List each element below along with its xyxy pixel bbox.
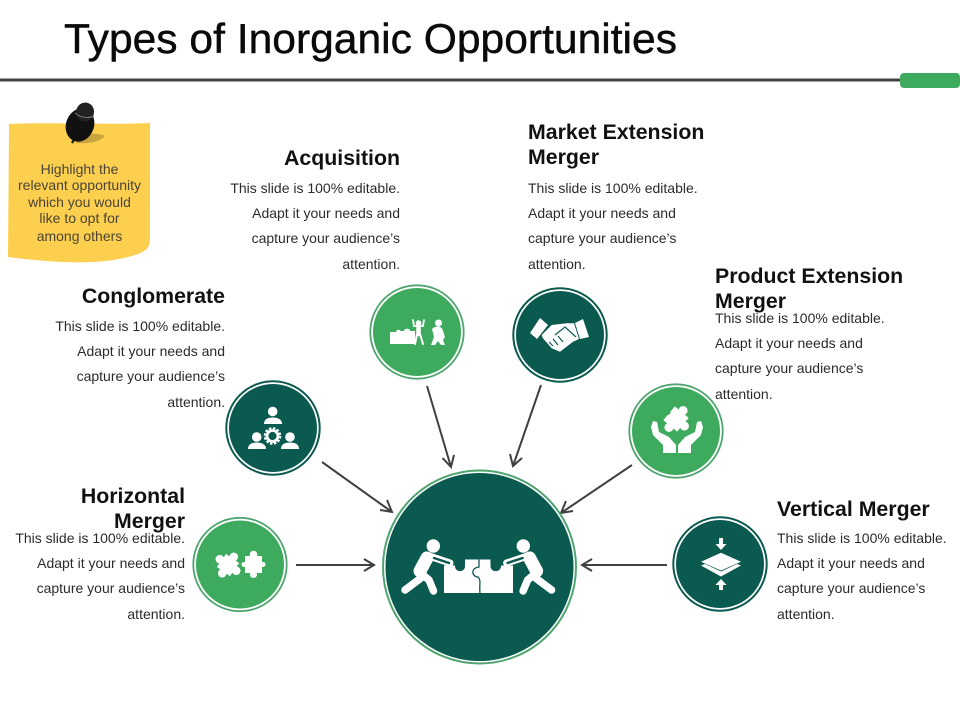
text block: Market Extension Merger: This slide is 100% editable.	[528, 180, 698, 196]
title: Types of Inorganic Opportunities	[64, 15, 677, 62]
text block: Horizontal Merger: attention.	[127, 606, 185, 622]
text block: Product Extension Merger	[715, 264, 903, 402]
text block: Product Extension Merger: Merger	[715, 289, 786, 313]
icon: puzzle pieces	[444, 560, 513, 593]
text block: Vertical Merger	[777, 497, 947, 622]
text block: Acquisition: attention.	[342, 256, 400, 272]
text block: Conglomerate	[55, 284, 225, 410]
text block: Product Extension Merger: Product Extension	[715, 264, 903, 288]
layers with arrows	[701, 538, 741, 590]
icon: right figure	[507, 539, 552, 591]
puzzle block	[390, 329, 415, 344]
text block: Horizontal Merger: Horizontal	[81, 484, 185, 508]
text block: Conglomerate: This slide is 100% editable.	[55, 318, 225, 334]
text block: Vertical Merger: Vertical Merger	[777, 497, 930, 521]
text block: Vertical Merger: capture your audience’s	[777, 580, 925, 596]
text block: Conglomerate: attention.	[167, 394, 225, 410]
puzzle seam	[473, 560, 480, 593]
text block: Conglomerate: capture your audience’s	[77, 368, 225, 384]
puzzle piece	[655, 398, 698, 441]
text block: Market Extension Merger: attention.	[528, 256, 586, 272]
sticky note	[8, 100, 150, 262]
circle icon: Conglomerate	[226, 381, 320, 475]
text block: Horizontal Merger	[15, 484, 185, 622]
arrow: Acquisition to centre	[427, 386, 454, 467]
note paper	[8, 123, 150, 262]
text block: Vertical Merger: attention.	[777, 606, 835, 622]
circle icon: Market Extension Merger	[513, 288, 607, 382]
circle icon: Vertical Merger	[673, 517, 767, 611]
note text: Highlight the	[41, 161, 119, 177]
text block: Acquisition	[230, 146, 400, 272]
text block: Market Extension Merger: Adapt it your needs and	[528, 205, 676, 221]
text block: Acquisition: Acquisition	[284, 146, 400, 170]
note text: which you would	[27, 194, 131, 210]
note text: like to opt for	[39, 210, 120, 226]
text block: Product Extension Merger: Adapt it your needs and	[715, 335, 863, 351]
circle icon: Product Extension Merger	[629, 384, 723, 478]
circle icon: Horizontal Merger	[193, 518, 287, 611]
text block: Horizontal Merger: Merger	[114, 509, 185, 533]
title rule with green tab	[0, 73, 960, 88]
text block: Acquisition: Adapt it your needs and	[252, 205, 400, 221]
handshake	[530, 318, 589, 352]
arrow: Market Extension to centre	[510, 385, 541, 466]
text block: Horizontal Merger: Adapt it your needs and	[37, 555, 185, 571]
text block: Product Extension Merger: This slide is 100% editable.	[715, 310, 885, 326]
text block: Product Extension Merger: capture your audience’s	[715, 360, 863, 376]
text block: Acquisition: capture your audience’s	[252, 230, 400, 246]
text block: Conglomerate: Adapt it your needs and	[77, 343, 225, 359]
text block: Product Extension Merger: attention.	[715, 386, 773, 402]
text block: Acquisition: This slide is 100% editable.	[230, 180, 400, 196]
circle icon: Acquisition	[370, 285, 464, 379]
icon: push pin	[61, 100, 105, 146]
open hands	[651, 421, 703, 453]
text block: Market Extension Merger: capture your audience’s	[528, 230, 676, 246]
arrow: Horizontal to centre	[296, 559, 374, 571]
standing figure	[413, 320, 424, 344]
text block: Vertical Merger: Adapt it your needs and	[777, 555, 925, 571]
note text: among others	[37, 228, 122, 244]
arrow: Product Extension to centre	[561, 465, 632, 513]
text block: Market Extension Merger	[528, 120, 704, 272]
text block: Horizontal Merger: This slide is 100% editable.	[15, 530, 185, 546]
text block: Vertical Merger: This slide is 100% editable.	[777, 530, 947, 546]
arrow: Conglomerate to centre	[322, 462, 392, 512]
three people and gear	[248, 407, 299, 449]
icon: left figure	[405, 539, 450, 591]
text block: Market Extension Merger: Merger	[528, 145, 599, 169]
text block: Market Extension Merger: Market Extension	[528, 120, 704, 144]
text block: Horizontal Merger: capture your audience’s	[37, 580, 185, 596]
note text	[18, 161, 141, 244]
text block: Conglomerate: Conglomerate	[82, 284, 225, 308]
walking figure	[431, 320, 445, 345]
two puzzle pieces	[208, 545, 266, 585]
note text: relevant opportunity	[18, 177, 141, 193]
centre circle with tug of war icon	[383, 470, 576, 664]
arrow: Vertical to centre	[582, 559, 667, 571]
